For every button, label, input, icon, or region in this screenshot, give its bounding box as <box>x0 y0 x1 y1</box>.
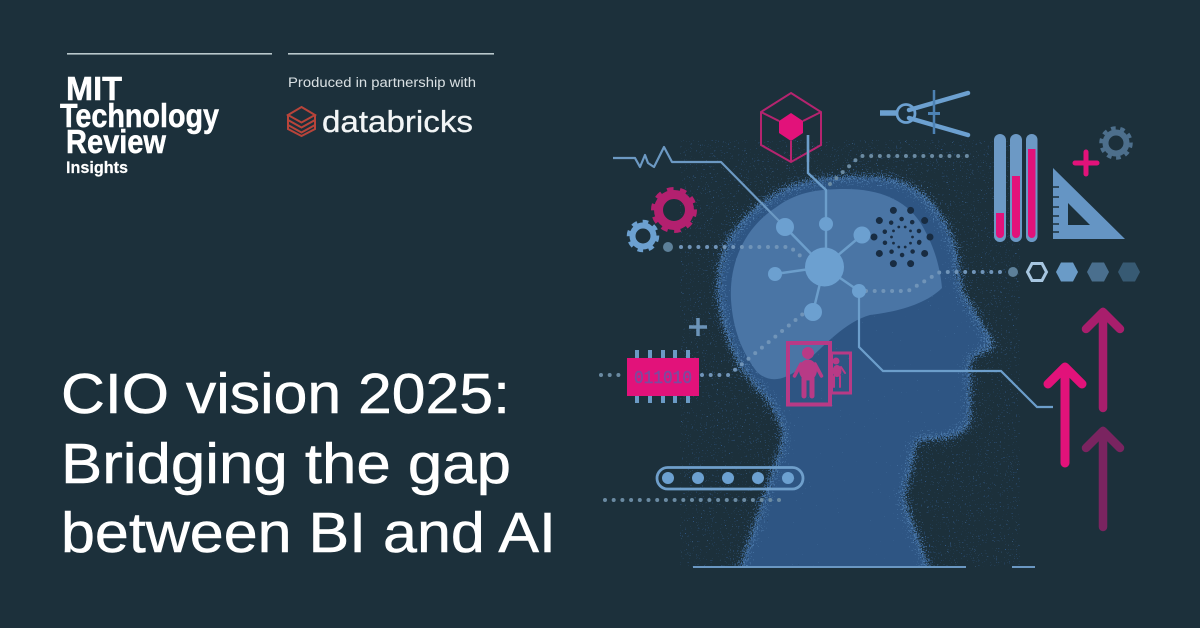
icon: compass <box>880 90 968 135</box>
icon: plus pink <box>1075 152 1097 174</box>
connector from node to face <box>859 291 1053 407</box>
resistor line <box>613 147 785 227</box>
head body <box>718 177 996 580</box>
bar fills <box>996 149 1036 238</box>
arrow: bright <box>1048 367 1082 463</box>
dotted connector: gears to brain <box>681 247 804 259</box>
person large <box>794 347 822 396</box>
title <box>61 362 556 565</box>
chip body <box>627 358 699 396</box>
dotted connector: chip to brain <box>702 313 804 375</box>
radial dot cluster <box>874 209 930 265</box>
cube core <box>779 113 803 141</box>
logo: MIT Technology Review Insights: Technology <box>60 97 220 134</box>
icon: plus blue <box>689 318 707 336</box>
title: between BI and AI <box>61 501 556 565</box>
network diagram <box>768 217 870 321</box>
logo: MIT Technology Review Insights: Review <box>66 123 166 160</box>
logo: databricks <box>288 104 473 139</box>
arrow: dim <box>1086 431 1120 527</box>
dotted connector: chip left <box>601 373 624 377</box>
floor line <box>693 566 1035 568</box>
title: Bridging the gap <box>61 432 511 496</box>
dotted connector: top right <box>830 156 972 184</box>
ruler ticks <box>1053 187 1059 232</box>
wordmark: databricks <box>322 104 473 139</box>
infographic canvas <box>60 53 1140 568</box>
head speckle <box>718 177 996 580</box>
icon: chip <box>627 350 699 403</box>
icon: databricks stack <box>288 107 315 136</box>
chip pins <box>637 350 688 403</box>
partnership text: Produced in partnership with <box>288 75 476 90</box>
chip digits: 011010 <box>634 369 692 389</box>
line over cube <box>807 135 809 162</box>
logo: MIT Technology Review Insights: Insights <box>66 158 128 177</box>
icon: bars <box>994 134 1038 242</box>
icon: gear pink <box>654 190 694 230</box>
conveyor rollers <box>662 472 794 484</box>
bar tracks <box>994 134 1038 242</box>
dotted connector: right to hexagons <box>866 272 1006 291</box>
arrow: medium <box>1086 312 1120 408</box>
icon: set square <box>1053 168 1125 239</box>
node end dot left <box>663 242 673 252</box>
brain region <box>731 189 942 379</box>
connector from cube <box>808 135 826 267</box>
network spokes <box>775 227 862 312</box>
card small <box>832 353 850 393</box>
icon: muted gear <box>1101 128 1131 158</box>
conveyor <box>657 468 803 489</box>
icon: gear blue <box>628 222 658 250</box>
hexagon outline <box>1028 264 1046 280</box>
title: CIO vision 2025: <box>61 362 510 426</box>
icon: people cards <box>788 343 850 404</box>
card large <box>788 343 830 404</box>
hexagon faint <box>1118 262 1140 282</box>
header rule left <box>67 53 272 55</box>
node end dot right <box>1008 267 1018 277</box>
cube outer frame <box>761 93 821 162</box>
hexagon mid <box>1087 262 1109 282</box>
person small <box>832 358 845 387</box>
dotted connector: bottom <box>605 498 782 502</box>
header rule right <box>288 53 494 55</box>
icon: cube <box>761 93 821 162</box>
logo: MIT Technology Review Insights <box>60 70 220 177</box>
hexagon row <box>1028 262 1140 282</box>
network nodes <box>768 217 870 321</box>
illustration: head silhouette <box>718 177 996 580</box>
logo: MIT Technology Review Insights: MIT <box>66 70 122 107</box>
hexagon solid <box>1056 262 1078 282</box>
conveyor track <box>657 468 803 489</box>
